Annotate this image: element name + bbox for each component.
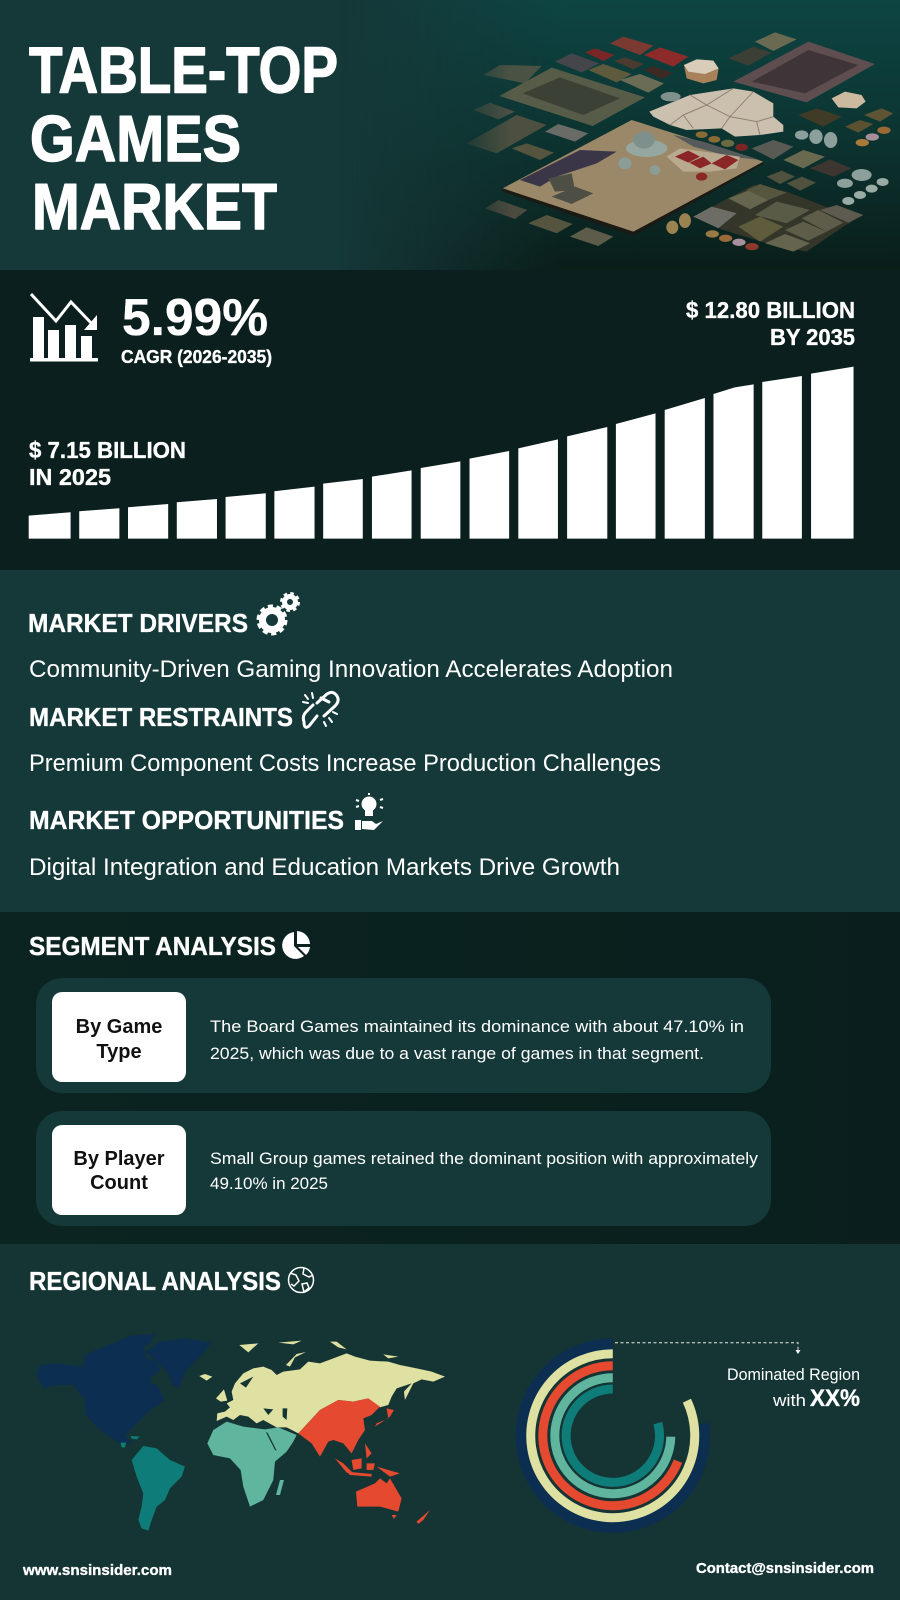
icon: globe (288, 1268, 314, 1292)
card: by player count (36, 1111, 771, 1226)
callout: dominated region: XX% (810, 1385, 860, 1412)
text: game type description: 2025, which was due to a vast range of games in that segment. (210, 1044, 704, 1063)
label: 2035 value (686, 297, 855, 350)
text: game type description (210, 1017, 744, 1063)
callout: dominated region: Dominated Region (727, 1365, 860, 1384)
label: by player count: By Player (73, 1148, 165, 1170)
heading: regional analysis: REGIONAL ANALYSIS (29, 1266, 281, 1296)
stat: CAGR: 5.99% (122, 289, 268, 347)
panel: header (0, 0, 900, 270)
label: 2025 value: $ 7.15 BILLION (29, 437, 186, 463)
text: player count description: Small Group games retained the dominant position with approximately (210, 1149, 759, 1168)
region: south america (121, 1436, 185, 1531)
title: GAMES (30, 102, 241, 175)
icon: gears (258, 594, 298, 634)
footer: website: www.snsinsider.com (22, 1562, 172, 1579)
panel: regional analysis (0, 1244, 900, 1600)
text: driver description: Community-Driven Gaming Innovation Accelerates Adoption (29, 656, 673, 683)
region: europe and north asia (199, 1341, 445, 1433)
label: by game type: By Game (76, 1016, 162, 1038)
label: 2035 value: $ 12.80 BILLION (686, 297, 855, 323)
label: 2025 value: IN 2025 (29, 464, 111, 490)
panel: market dynamics (0, 570, 900, 912)
footer: contact: Contact@snsinsider.com (696, 1560, 874, 1577)
title: TABLE-TOP (29, 34, 338, 106)
title: MARKET (32, 170, 277, 243)
text: restraint description: Premium Component Costs Increase Production Challenges (29, 750, 661, 777)
icon: declining chart (30, 294, 98, 362)
label: 2035 value: BY 2035 (770, 324, 855, 350)
heading: market drivers: MARKET DRIVERS (28, 608, 248, 638)
heading: market opportunities: MARKET OPPORTUNITIES (29, 805, 344, 835)
arrow: dashed leader (615, 1343, 800, 1354)
region: asia pacific (298, 1398, 430, 1524)
text: game type description: The Board Games maintained its dominance with about 47.10% in (210, 1017, 744, 1036)
heading: segment analysis: SEGMENT ANALYSIS (29, 931, 276, 961)
title (29, 34, 338, 243)
label: 2025 value (29, 437, 186, 490)
world map (36, 1334, 445, 1531)
radial bar chart (521, 1344, 704, 1527)
text: player count description: 49.10% in 2025 (210, 1174, 328, 1193)
icon: pie chart (282, 931, 310, 959)
panel: segment analysis (0, 912, 900, 1244)
icon: broken chain (303, 692, 338, 727)
label: by game type (52, 992, 186, 1082)
label: by player count: Count (90, 1172, 148, 1194)
text: player count description (210, 1149, 759, 1193)
callout: dominated region (727, 1365, 860, 1412)
region: north america (36, 1334, 212, 1443)
panel: market size forecast (0, 270, 900, 570)
icon: lightbulb on hand (355, 793, 383, 830)
label: by player count (52, 1125, 186, 1215)
stat: CAGR: CAGR (2026-2035) (121, 347, 272, 367)
image: board game components (467, 32, 893, 252)
label: by game type: Type (96, 1041, 142, 1063)
text: opportunity description: Digital Integration and Education Markets Drive Growth (29, 854, 620, 881)
region: africa and middle east (207, 1422, 297, 1507)
card: by game type (36, 978, 771, 1093)
heading: market restraints: MARKET RESTRAINTS (29, 702, 293, 732)
callout: dominated region: with (772, 1391, 806, 1410)
bar chart: market growth (29, 367, 854, 539)
